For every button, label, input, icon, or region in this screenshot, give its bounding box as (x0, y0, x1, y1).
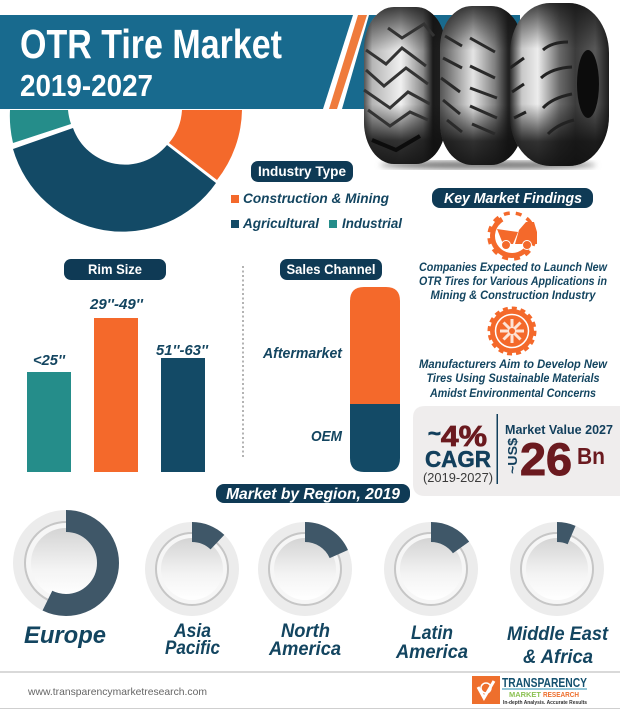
panel: CAGR and market value (413, 406, 620, 496)
tire: middle (440, 6, 523, 165)
label: 29 to 49 inch: 29''-49'' (89, 296, 143, 313)
label: North America (268, 621, 341, 660)
banner band (0, 15, 353, 109)
tire hole (577, 50, 599, 118)
label: Asia Pacific (165, 621, 220, 659)
title years: 2019-2027 (20, 68, 153, 103)
ring chart: North America (258, 522, 352, 660)
CAGR figure: 4% (441, 421, 487, 453)
icon: orange wheel (489, 308, 535, 354)
label: Middle East and Africa (507, 624, 609, 668)
label: Middle East and Africa: & Africa (523, 647, 593, 668)
donut segment: construction and mining (169, 110, 242, 180)
text: finding one: OTR Tires for Various Applications in (419, 276, 607, 288)
label: North America: America (268, 639, 341, 660)
pill: sales channel: Sales Channel (286, 261, 376, 277)
legend: industry type: Agricultural (242, 215, 320, 231)
text: finding two (419, 359, 608, 400)
logo tagline: In-depth Analysis. Accurate Results (503, 700, 587, 706)
CAGR figure: ~ (428, 423, 441, 445)
donut segment: industrial (10, 110, 71, 143)
logo: Transparency Market Research (472, 676, 588, 706)
legend: industry type: Industrial (342, 215, 403, 231)
footer website: www.transparencymarketresearch.com (27, 686, 207, 698)
label: Latin America: Latin (411, 623, 453, 644)
ring chart: Latin America (384, 522, 478, 663)
ring chart: Asia Pacific (145, 522, 239, 659)
panel divider (496, 414, 498, 484)
bar: under 25 inch (27, 372, 71, 472)
donut chart: industry type (10, 110, 242, 232)
text: finding one (419, 262, 608, 302)
label: Latin America: America (395, 642, 468, 663)
text: finding one: Companies Expected to Launch New (419, 262, 608, 274)
tire: left (364, 7, 446, 164)
CAGR period: (2019-2027) (423, 471, 493, 485)
banner right section (342, 15, 520, 109)
pill: rim size: Rim Size (88, 261, 142, 277)
legend: industry type: Construction & Mining (243, 190, 389, 206)
text: finding two: Amidst Environmental Concerns (429, 388, 596, 400)
bar chart: rim size (27, 296, 208, 472)
bar: 29 to 49 inch (94, 318, 138, 472)
logo name: TRANSPARENCY (502, 676, 588, 690)
currency label: ~US$ (505, 437, 520, 474)
ring chart: Europe (13, 510, 119, 649)
pill: market by region: Market by Region, 2019 (226, 486, 400, 503)
pill: rim size (64, 259, 166, 280)
tire: right (510, 3, 609, 166)
pill: key market findings: Key Market Findings (444, 190, 582, 207)
icon: gear with dump truck (483, 207, 541, 265)
text: finding two: Tires Using Sustainable Materials (426, 373, 600, 385)
CAGR label: CAGR (425, 446, 491, 472)
segment: OEM (350, 404, 400, 472)
segment: aftermarket (350, 287, 400, 404)
pill: industry type: Industry Type (258, 163, 346, 179)
logo research: RESEARCH (543, 690, 579, 699)
tire shadow (380, 161, 596, 169)
label: Europe: Europe (24, 622, 106, 649)
title text: OTR Tire Market (20, 21, 282, 67)
logo mark (472, 676, 500, 704)
market value label: Market Value 2027 (505, 423, 613, 437)
title banner (0, 15, 520, 109)
label: 51 to 63 inch: 51''-63'' (156, 342, 208, 359)
banner accent stripe (329, 15, 367, 109)
ring chart: Middle East and Africa (507, 522, 609, 668)
text: finding one: Mining & Construction Industry (430, 290, 596, 302)
market value figure: 26 (520, 434, 572, 485)
label: Latin America (395, 623, 468, 663)
pill: industry type (251, 161, 353, 182)
market value unit: Bn (577, 443, 605, 469)
logo market: MARKET (509, 690, 541, 699)
stacked bar: sales channel (262, 287, 400, 472)
donut segment: agricultural (13, 128, 216, 232)
label: OEM: OEM (311, 428, 342, 445)
label: aftermarket: Aftermarket (262, 345, 343, 362)
label: Asia Pacific: Asia (173, 621, 211, 642)
tires photo (364, 3, 609, 169)
label: Middle East and Africa: Middle East (507, 624, 609, 645)
label: under 25 inch: <25'' (33, 352, 65, 369)
bar: 51 to 63 inch (161, 358, 205, 472)
text: finding two: Manufacturers Aim to Develop New (419, 359, 608, 371)
label: North America: North (281, 621, 330, 642)
label: Asia Pacific: Pacific (165, 638, 220, 659)
legend: industry type (231, 190, 403, 231)
